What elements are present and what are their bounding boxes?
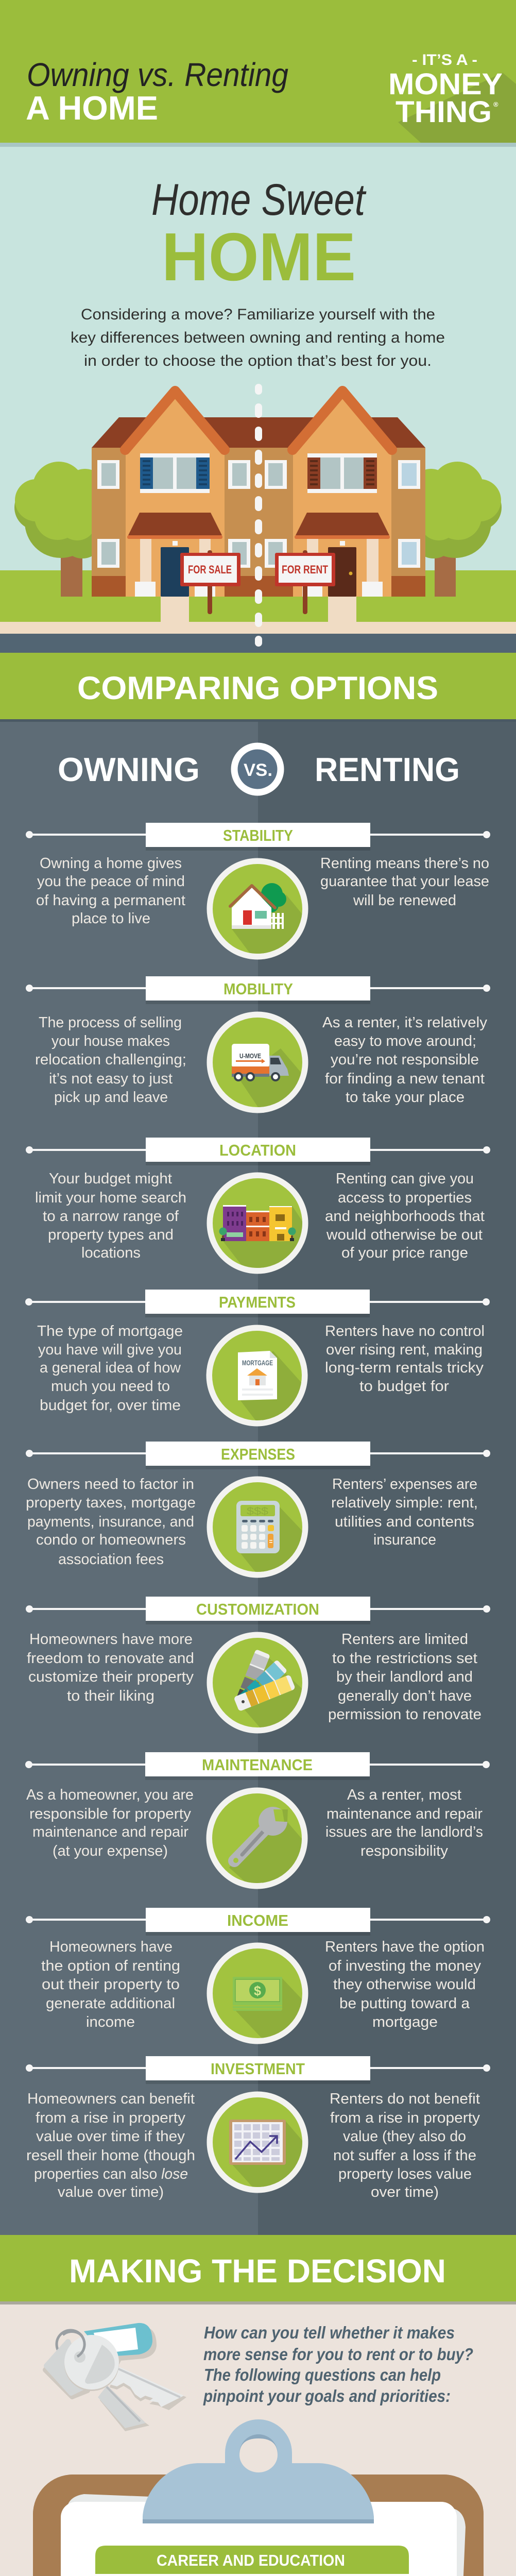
renting text (328, 1631, 481, 1723)
sign: for rent (275, 550, 335, 614)
section band: comparing options: COMPARING OPTIONS (77, 670, 438, 706)
renting text: property loses value (338, 2166, 472, 2182)
main roof (92, 417, 425, 448)
renting text: Renting means there’s no (320, 855, 489, 872)
renting text: insurance (373, 1532, 436, 1548)
owning text: Homeowners have more (29, 1631, 193, 1648)
section band: making the decision (0, 2235, 516, 2301)
renting text: Renters have the option (325, 1939, 485, 1955)
owning text: income (86, 2014, 135, 2030)
row: income (26, 1908, 490, 2045)
renting text: long-term rentals tricky (325, 1360, 484, 1376)
header bar: CAREER AND EDUCATION (157, 2551, 345, 2569)
renting text: access to properties (338, 1190, 472, 1206)
owning text: (at your expense) (53, 1843, 168, 1859)
label: investment (26, 2056, 490, 2084)
header title (26, 56, 288, 127)
renting text: from a rise in property (330, 2110, 480, 2126)
owning text: limit your home search (35, 1190, 186, 1206)
renting text: guarantee that your lease (320, 873, 489, 890)
owning text: Homeowners have (49, 1939, 173, 1955)
owning text: The type of mortgage (37, 1323, 183, 1340)
renting text (325, 1787, 483, 1859)
intro paragraph: Considering a move? Familiarize yourself with the (81, 306, 435, 323)
renting text: to take your place (346, 1089, 465, 1106)
owning text: condo or homeowners (36, 1532, 186, 1548)
icon: calculator: $$$ (247, 1506, 268, 1517)
panel: intro background (0, 147, 516, 570)
owning text: maintenance and repair (32, 1824, 188, 1840)
renting text: value (they also do (343, 2128, 466, 2145)
label: customization (26, 1597, 490, 1624)
renting text: would otherwise be out (326, 1227, 483, 1243)
renting text: permission to renovate (328, 1706, 481, 1723)
renting text: over time) (371, 2184, 439, 2200)
back sheet of paper (46, 2494, 466, 2576)
renting text: generally don’t have (338, 1688, 472, 1704)
owning text: association fees (58, 1551, 164, 1568)
owning text: The process of selling (39, 1014, 182, 1031)
label: mobility: MOBILITY (223, 980, 293, 998)
owning text (36, 855, 185, 927)
lead-in question: more sense for you to rent or to buy? (203, 2345, 473, 2364)
renting text: As a renter, it’s relatively (322, 1014, 488, 1031)
owning text: your house makes (51, 1033, 170, 1049)
column heading: owning vs renting: RENTING (315, 751, 460, 788)
owning text: resell their home (though (26, 2147, 195, 2164)
owning text (26, 1476, 196, 1568)
doors (161, 547, 356, 597)
owning text: of having a permanent (36, 892, 185, 909)
label: income: INCOME (227, 1911, 288, 1929)
lead-in question: pinpoint your goals and priorities: (203, 2386, 451, 2405)
header bar (95, 2546, 409, 2574)
renting text: for finding a new tenant (325, 1071, 485, 1087)
label: stability (26, 823, 490, 851)
owning text: much you need to (51, 1378, 170, 1395)
logo: It's a Money Thing: MONEY (388, 67, 503, 101)
owning text: property types and (48, 1227, 174, 1243)
renting text: mortgage (372, 2014, 438, 2030)
lead-in question (203, 2323, 473, 2405)
label: location (26, 1138, 490, 1165)
renting text: of your price range (341, 1245, 468, 1261)
label: investment: INVESTMENT (211, 2060, 305, 2078)
owning text (26, 1787, 194, 1859)
renting text: Renters are limited (341, 1631, 468, 1648)
owning text: from a rise in property (36, 2110, 186, 2126)
renting text (325, 1939, 485, 2030)
owning text: payments, insurance, and (27, 1514, 194, 1530)
renting text: As a renter, most (347, 1787, 461, 1803)
owning text: value over time) (58, 2184, 164, 2200)
icon: buildings (207, 1173, 309, 1274)
renting text: you’re not responsible (331, 1052, 479, 1068)
owning text: As a homeowner, you are (26, 1787, 194, 1803)
owning text: customize their property (28, 1669, 194, 1685)
section band: comparing options (0, 653, 516, 719)
illustration: houses for sale and for rent (0, 384, 516, 653)
renting text: easy to move around; (334, 1033, 476, 1049)
icon: cash stack: $ (254, 1983, 262, 1998)
owning text: value over time if they (36, 2128, 185, 2145)
logo: It's a Money Thing: ® (493, 100, 498, 108)
owning text: Homeowners can benefit (27, 2091, 195, 2107)
logo: It's a Money Thing (388, 52, 503, 129)
left tree (14, 462, 106, 597)
dashed divider (255, 384, 262, 647)
owning text: it’s not easy to just (49, 1071, 173, 1087)
label: maintenance (25, 1752, 490, 1780)
icon: house keys (45, 2323, 186, 2431)
lead-in question: The following questions can help (204, 2365, 441, 2384)
renting text (320, 855, 489, 909)
owning text: property taxes, mortgage (26, 1495, 196, 1511)
renting text (330, 2091, 480, 2200)
clipboard board (33, 2475, 484, 2576)
owning text: relocation challenging; (35, 1052, 186, 1068)
section band: making the decision: MAKING THE DECISION (69, 2252, 446, 2290)
renting text: they otherwise would (333, 1976, 476, 1993)
header title: Owning vs. Renting (27, 56, 288, 93)
row: investment (26, 2056, 490, 2200)
owning text (35, 1014, 186, 1106)
walkways (161, 597, 356, 622)
renting text: relatively simple: rent, (331, 1495, 478, 1511)
right tree (410, 462, 502, 597)
clipboard clip (143, 2419, 374, 2523)
owning text: a general idea of how (40, 1360, 181, 1376)
panel: decision background (0, 2301, 516, 2576)
heading: Home Sweet HOME (151, 175, 367, 295)
panel: comparison background (0, 719, 516, 2235)
label: payments (25, 1290, 490, 1317)
renting text: of investing the money (329, 1958, 481, 1974)
row: customization (26, 1597, 490, 1734)
upper window: blue shutters (140, 453, 210, 493)
header title: A HOME (26, 89, 158, 127)
row: mobility (26, 976, 490, 1118)
owning text (37, 1323, 183, 1414)
owning text: budget for, over time (40, 1397, 181, 1414)
owning text: locations (81, 1245, 141, 1261)
renting text: Renting can give you (336, 1171, 474, 1187)
label: location: LOCATION (219, 1141, 296, 1159)
porch awnings (127, 513, 390, 539)
owning text: to their liking (67, 1688, 154, 1704)
owning text: you the peace of mind (37, 873, 185, 890)
owning text: to a narrow range of (43, 1208, 179, 1225)
owning text: the option of renting (41, 1958, 180, 1974)
renting text: and neighborhoods that (325, 1208, 485, 1225)
owning text (35, 1171, 186, 1261)
renting text: by their landlord and (336, 1669, 473, 1685)
renting text: issues are the landlord’s (325, 1824, 483, 1840)
owning text: properties can also lose (34, 2166, 188, 2182)
icon: paint swatches (207, 1632, 309, 1734)
owning text: responsible for property (29, 1806, 192, 1822)
row: stability (26, 823, 490, 963)
sign: for sale: FOR SALE (188, 563, 232, 576)
row: location (26, 1138, 490, 1274)
front sheet of paper (61, 2502, 457, 2576)
logo: It's a Money Thing: - IT’S A - (412, 52, 477, 69)
logo: It's a Money Thing: THING (395, 95, 492, 129)
renting text: maintenance and repair (326, 1806, 483, 1822)
icon: moving truck: U-MOVE (239, 1052, 261, 1060)
label: payments: PAYMENTS (219, 1293, 296, 1311)
row: payments (25, 1290, 490, 1430)
renting text: not suffer a loss if the (333, 2147, 476, 2164)
icon: growth chart (207, 2092, 309, 2195)
renting text (325, 1323, 485, 1395)
intro paragraph: key differences between owning and renting a home (71, 329, 445, 346)
column heading: owning vs renting: VS. (244, 760, 272, 780)
icon: mortgage document: MORTGAGE (242, 1359, 273, 1367)
owning text: Your budget might (49, 1171, 172, 1187)
renting text: Renters’ expenses are (332, 1476, 477, 1493)
renting text: to the restrictions set (332, 1650, 477, 1667)
label: expenses: EXPENSES (221, 1445, 295, 1463)
icon: mortgage document (206, 1325, 309, 1430)
owning text (41, 1939, 180, 2030)
owning text: place to live (72, 910, 150, 927)
heading: Home Sweet HOME: HOME (162, 219, 356, 295)
renting text: will be renewed (353, 892, 456, 909)
owning text (27, 1631, 194, 1704)
house walls (92, 397, 425, 597)
icon: house (207, 858, 309, 963)
owning text: generate additional (46, 1995, 175, 2012)
small side windows (97, 460, 420, 568)
panel: page header band (0, 0, 516, 147)
owning text: you have will give you (38, 1342, 182, 1358)
gable trim (125, 391, 392, 450)
owning text: freedom to renovate and (27, 1650, 194, 1667)
label: customization: CUSTOMIZATION (196, 1600, 319, 1618)
column heading: owning vs renting: OWNING (58, 751, 200, 788)
icon: cash stack (207, 1942, 309, 2045)
renting text: responsibility (360, 1843, 448, 1859)
owning text (26, 2091, 195, 2200)
icon: moving truck (207, 1012, 309, 1118)
upper window: brown shutters (307, 453, 377, 493)
renting text (322, 1014, 488, 1106)
column heading: owning vs renting (58, 746, 460, 792)
label: maintenance: MAINTENANCE (202, 1756, 313, 1774)
owning text: Owning a home gives (40, 855, 182, 872)
label: expenses (26, 1442, 490, 1469)
owning text: pick up and leave (54, 1089, 168, 1106)
sign: for rent: FOR RENT (282, 563, 328, 576)
renting text: Renters do not benefit (330, 2091, 480, 2107)
heading: Home Sweet HOME: Home Sweet (151, 175, 367, 225)
renting text: be putting toward a (339, 1995, 470, 2012)
label: mobility (26, 976, 490, 1004)
icon: wrench (206, 1788, 309, 1889)
intro paragraph: in order to choose the option that’s best for you. (84, 352, 432, 369)
row: expenses (26, 1442, 490, 1578)
row: maintenance (25, 1752, 490, 1889)
label: income (26, 1908, 490, 1936)
owning text: Owners need to factor in (27, 1476, 194, 1493)
renting text: utilities and contents (335, 1514, 474, 1530)
renting text: to budget for (359, 1378, 449, 1395)
porch columns (135, 539, 383, 597)
lead-in question: How can you tell whether it makes (204, 2323, 455, 2342)
checklist: career and education (95, 2546, 416, 2576)
renting text (331, 1476, 478, 1548)
intro paragraph (71, 306, 445, 369)
renting text: over rising rent, making (326, 1342, 483, 1358)
icon: calculator (207, 1477, 309, 1578)
owning text: out their property to (42, 1976, 180, 1993)
renting text: Renters have no control (325, 1323, 485, 1340)
sign: for sale (180, 550, 240, 614)
label: stability: STABILITY (223, 826, 293, 844)
renting text (325, 1171, 485, 1261)
